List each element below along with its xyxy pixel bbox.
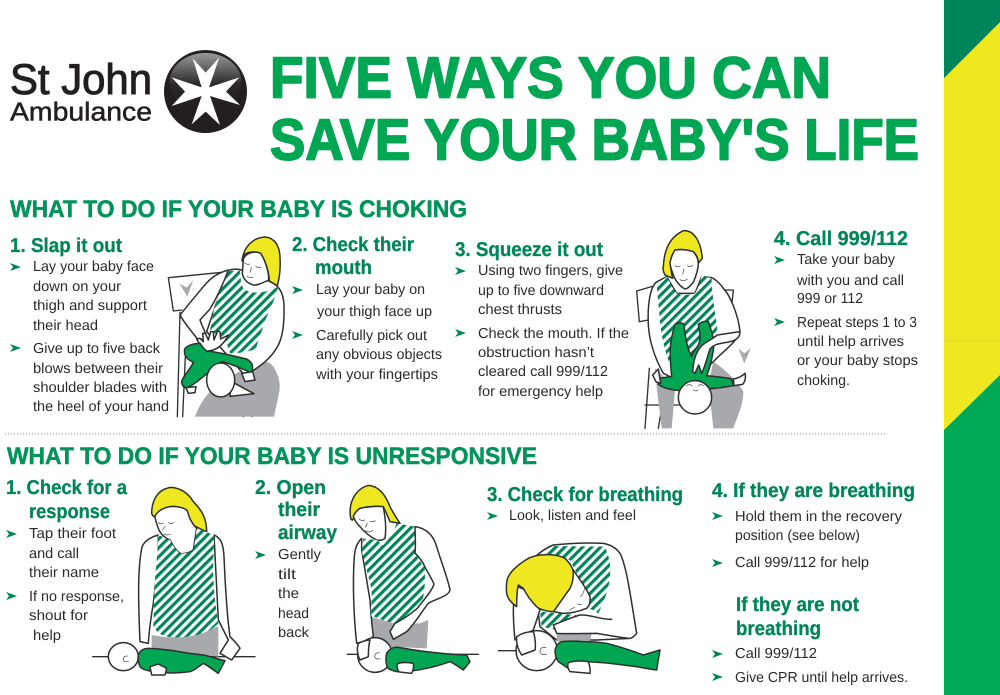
- step: call 999/112: until help arrives: [797, 334, 904, 350]
- step: if they are not breathing: Give CPR until help arrives.: [735, 670, 908, 686]
- step: open their airway: [255, 477, 338, 641]
- step: squeeze it out: for emergency help: [478, 384, 603, 400]
- step: squeeze it out: [455, 239, 629, 400]
- step: call 999/112: [774, 228, 918, 389]
- step: squeeze it out: Check the mouth. If the: [478, 326, 629, 342]
- step: call 999/112: Take your baby: [797, 252, 896, 268]
- step: check their mouth: Carefully pick out: [316, 328, 427, 344]
- step: slap it out: their head: [33, 318, 98, 334]
- step: check for a response: If no response,: [29, 589, 124, 605]
- step: check for breathing: 3. Check for breathing: [487, 484, 683, 506]
- logo: St John Ambulance: [10, 50, 247, 133]
- step: if they are not breathing: If they are not: [736, 594, 859, 616]
- step: check for a response: 1. Check for a: [6, 477, 128, 499]
- step: squeeze it out: obstruction hasn’t: [478, 345, 594, 361]
- step: squeeze it out: up to five downward: [478, 283, 604, 299]
- section heading: choking: WHAT TO DO IF YOUR BABY IS CHOKING: [10, 196, 467, 223]
- step: squeeze it out: cleared call 999/112: [478, 364, 608, 380]
- step: if they are breathing: [712, 480, 915, 571]
- step: check their mouth: any obvious objects: [316, 347, 442, 363]
- step: check their mouth: 2. Check their: [292, 234, 414, 256]
- step: check for a response: their name: [29, 565, 99, 581]
- illustration: checking breathing: [498, 543, 660, 673]
- illustration: opening airway: [347, 485, 478, 673]
- step: if they are not breathing: breathing: [736, 618, 821, 640]
- step: slap it out: blows between their: [33, 361, 163, 377]
- step: check for a response: [6, 477, 128, 644]
- section heading: unresponsive: WHAT TO DO IF YOUR BABY IS UNRESPONSIVE: [7, 443, 537, 470]
- step: open their airway: their: [278, 499, 320, 521]
- step: check their mouth: [292, 234, 442, 383]
- step: check their mouth: with your fingertips: [315, 367, 438, 383]
- step: open their airway: the: [278, 586, 299, 602]
- step: call 999/112: Repeat steps 1 to 3: [797, 315, 917, 331]
- step: open their airway: airway: [278, 522, 338, 544]
- step: slap it out: [10, 235, 169, 415]
- logo: St John Ambulance: St John: [10, 56, 152, 104]
- step: call 999/112: 4. Call 999/112: [774, 228, 908, 250]
- step: if they are breathing: Call 999/112 for help: [735, 555, 869, 571]
- side colour band: [944, 0, 1000, 695]
- step: check for a response: help: [33, 628, 61, 644]
- step: if they are not breathing: [712, 594, 908, 686]
- step: check for a response: and call: [29, 546, 79, 562]
- illustration: back blows: [168, 237, 284, 417]
- illustration: chest thrusts: [637, 231, 751, 428]
- step: check for a response: shout for: [29, 608, 88, 624]
- step: call 999/112: 999 or 112: [797, 291, 863, 307]
- step: if they are breathing: 4. If they are breathing: [712, 480, 915, 502]
- step: open their airway: Gently: [278, 547, 322, 563]
- step: call 999/112: or your baby stops: [797, 353, 918, 369]
- title: [270, 46, 919, 172]
- step: squeeze it out: 3. Squeeze it out: [455, 239, 603, 261]
- step: if they are not breathing: Call 999/112: [735, 646, 817, 662]
- step: check for a response: response: [29, 501, 110, 523]
- step: squeeze it out: Using two fingers, give: [478, 263, 623, 279]
- step: slap it out: shoulder blades with: [33, 380, 167, 396]
- step: check their mouth: your thigh face up: [317, 304, 432, 320]
- step: if they are breathing: Hold them in the recovery: [735, 509, 903, 525]
- title: FIVE WAYS YOU CAN: [270, 46, 831, 110]
- step: call 999/112: choking.: [797, 373, 850, 389]
- step: squeeze it out: chest thrusts: [478, 302, 562, 318]
- step: open their airway: tilt: [278, 567, 296, 583]
- step: check their mouth: mouth: [315, 257, 372, 279]
- illustration: checking response: [93, 487, 255, 675]
- step: if they are breathing: position (see below): [735, 528, 860, 544]
- step: check for a response: Tap their foot: [29, 526, 116, 542]
- step: slap it out: Give up to five back: [33, 341, 161, 357]
- step: open their airway: back: [278, 625, 310, 641]
- step: slap it out: Lay your baby face: [33, 259, 154, 275]
- title: SAVE YOUR BABY'S LIFE: [270, 108, 919, 172]
- step: call 999/112: with you and call: [796, 273, 904, 289]
- step: open their airway: 2. Open: [255, 477, 326, 499]
- step: check for breathing: Look, listen and feel: [509, 508, 636, 524]
- step: slap it out: the heel of your hand: [33, 399, 169, 415]
- step: check for breathing: [487, 484, 683, 524]
- step: slap it out: 1. Slap it out: [10, 235, 122, 257]
- step: slap it out: thigh and support: [33, 298, 147, 314]
- logo: St John Ambulance: Ambulance: [10, 96, 152, 126]
- step: check their mouth: Lay your baby on: [316, 282, 425, 298]
- step: slap it out: down on your: [33, 279, 121, 295]
- step: open their airway: head: [278, 606, 309, 622]
